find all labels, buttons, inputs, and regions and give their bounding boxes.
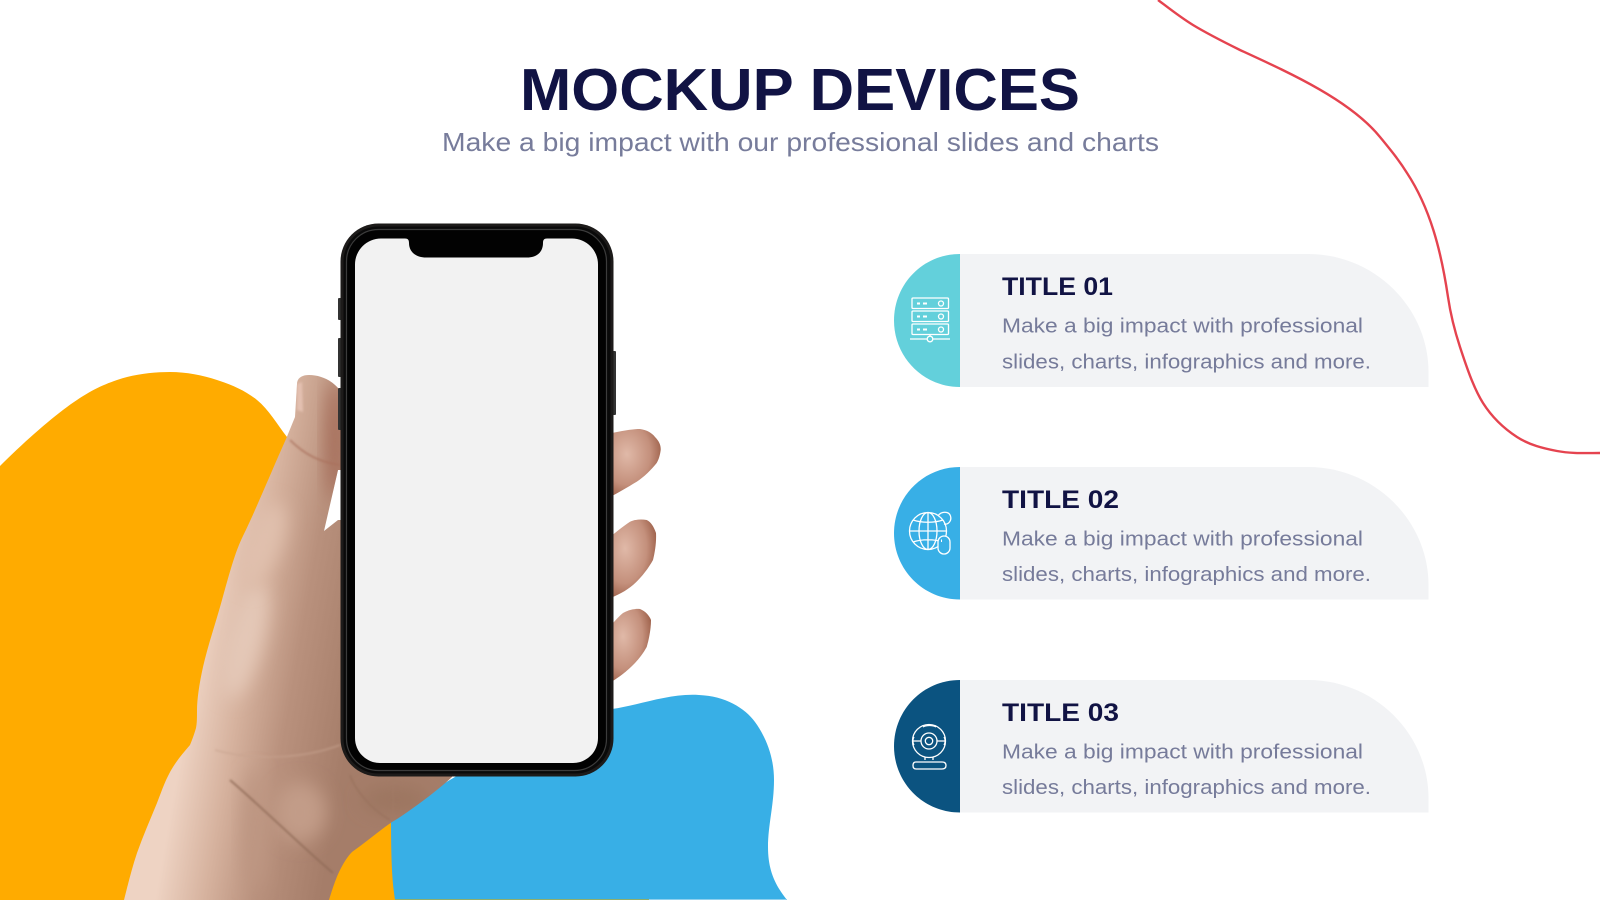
phone side buttons: [338, 298, 616, 430]
card 02 body text: slides, charts, infographics and more.: [1002, 563, 1371, 586]
card 01 heading: TITLE 01: [1002, 273, 1113, 301]
card 03: [894, 680, 1428, 812]
card 02 background: [960, 467, 1428, 600]
hand holding phone: [124, 224, 661, 900]
hand: ring finger: [606, 609, 651, 685]
hand: middle finger: [606, 520, 656, 600]
icon: server: [910, 298, 950, 342]
card 02 body text: Make a big impact with professional: [1002, 527, 1363, 550]
card 01 background: [960, 254, 1428, 387]
decorative background blob: blue: [391, 695, 787, 900]
card 03 background: [960, 680, 1428, 812]
hand: index finger: [606, 429, 661, 499]
card 02 icon tab: [894, 467, 960, 600]
decorative red curve: [1158, 0, 1600, 453]
phone: [338, 224, 616, 776]
subtitle: Make a big impact with our professional slides and charts: [442, 127, 1159, 157]
card 01 body text: slides, charts, infographics and more.: [1002, 350, 1371, 374]
card 03 body text: slides, charts, infographics and more.: [1002, 776, 1371, 799]
title: MOCKUP DEVICES: [520, 57, 1080, 123]
card 03 body text: [1002, 740, 1371, 799]
card 02: [894, 467, 1428, 600]
card 01 body text: Make a big impact with professional: [1002, 314, 1363, 338]
hand: palm and thumb: [124, 375, 460, 900]
card 01 icon tab: [894, 254, 960, 387]
icon: globe with mouse: [910, 512, 951, 554]
card 02 body text: [1002, 527, 1371, 586]
card 01: [894, 254, 1428, 387]
card 03 body text: Make a big impact with professional: [1002, 740, 1363, 763]
card 02 heading: TITLE 02: [1002, 486, 1119, 514]
card 01 body text: [1002, 314, 1371, 374]
phone body: [340, 224, 614, 776]
card 03 heading: TITLE 03: [1002, 699, 1119, 727]
phone screen with notch: [355, 238, 598, 763]
icon: webcam: [912, 724, 946, 769]
decorative background blob: orange: [0, 372, 396, 900]
card 03 icon tab: [894, 680, 960, 812]
